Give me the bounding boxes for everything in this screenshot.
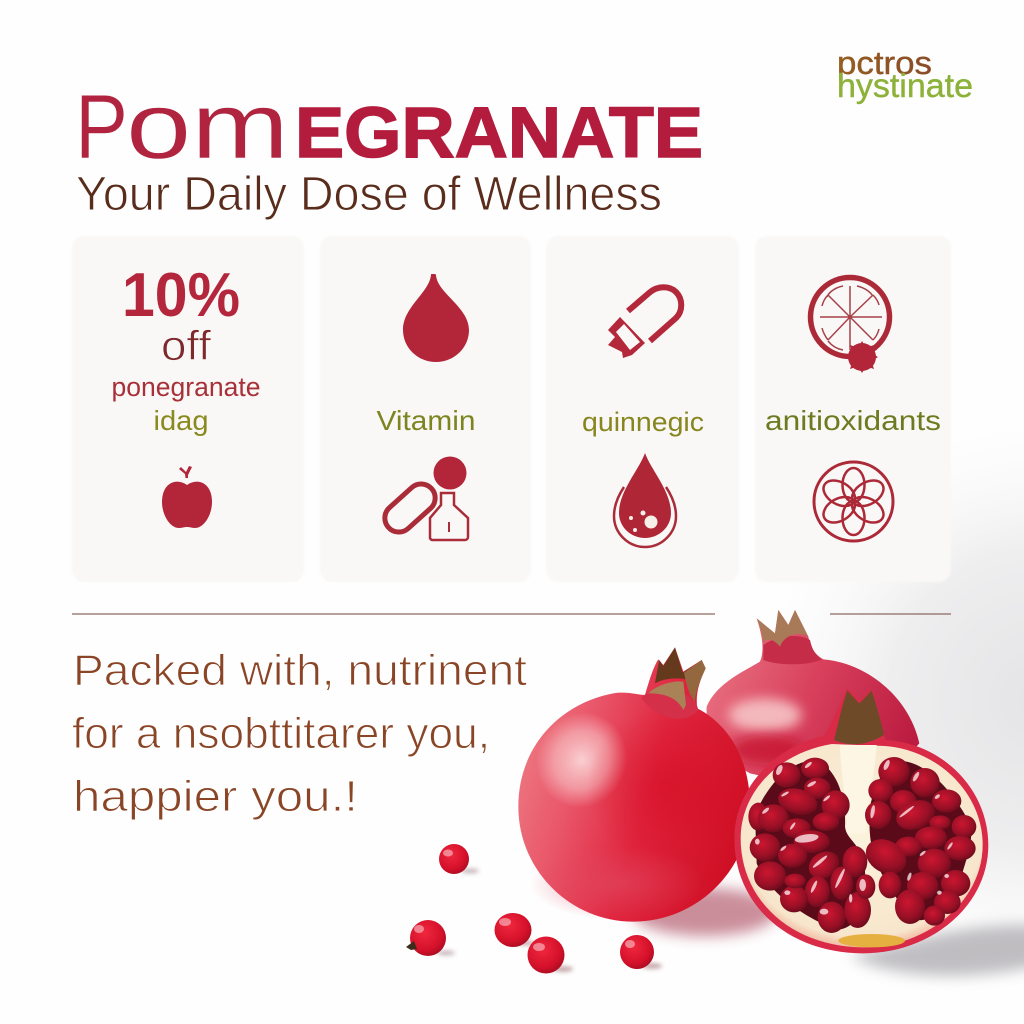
panel: discount <box>72 236 304 582</box>
discount word: off <box>161 322 211 369</box>
tagline: happier you.! <box>73 772 358 821</box>
panel: antioxidants <box>755 236 951 582</box>
panel label: quinnegic <box>582 407 704 437</box>
pith <box>741 744 983 947</box>
panel: quinic <box>546 236 739 582</box>
crown <box>834 691 884 744</box>
dark seed backing <box>755 760 972 930</box>
tagline: Packed with, nutrinent <box>73 646 527 695</box>
icon: flower slice <box>814 462 893 541</box>
subtitle: Your Daily Dose of Wellness <box>76 168 662 221</box>
ground shadows <box>633 888 1024 976</box>
logo: hystinate <box>837 67 973 104</box>
burst <box>846 341 878 373</box>
seed highlights <box>755 759 954 915</box>
centre membrane <box>840 745 877 833</box>
icon: blood drop with bubbles <box>614 453 676 547</box>
whole pomegranate: front <box>518 647 750 922</box>
logo: pctros <box>837 45 932 81</box>
tagline <box>72 646 527 821</box>
loose arils <box>406 844 662 974</box>
title: om <box>126 73 289 178</box>
panel label: Vitamin <box>376 405 476 436</box>
product name: ponegranate <box>112 372 260 402</box>
title: P <box>75 77 128 178</box>
icon: apple <box>162 466 212 528</box>
icon: capsule <box>608 287 681 358</box>
panel: vitamin <box>320 236 531 582</box>
discount figure: 10% <box>122 261 240 330</box>
whole pomegranate: back <box>707 610 919 800</box>
rind <box>734 688 988 953</box>
icon: citrus slice <box>810 278 890 373</box>
halved pomegranate <box>734 688 988 953</box>
title <box>75 73 703 178</box>
logo <box>837 45 973 104</box>
panel label: idag <box>154 405 208 436</box>
title: EGRANATE <box>295 94 703 173</box>
base membrane <box>838 934 905 947</box>
icon: pill and bottle <box>379 456 468 540</box>
tagline: for a nsobttitarer you, <box>72 709 490 758</box>
panel label: anitioxidants <box>765 405 941 436</box>
icon: droplet <box>403 274 469 362</box>
seeds <box>748 757 976 933</box>
